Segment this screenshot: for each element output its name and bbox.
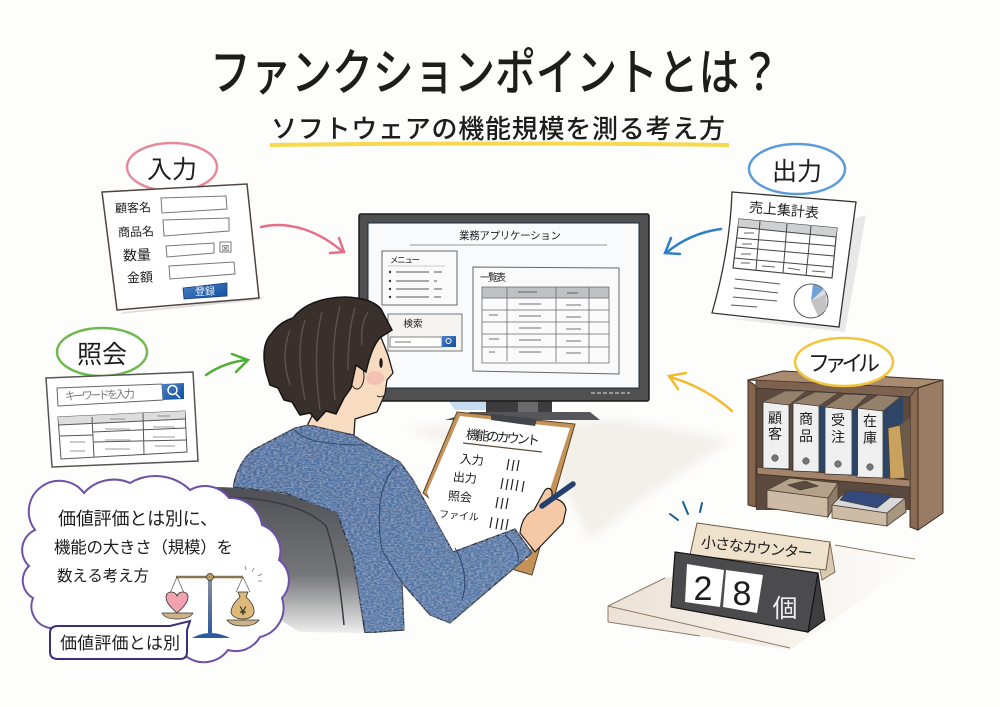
input form: 登録 <box>195 285 215 298</box>
search panel <box>388 314 462 351</box>
bookshelf: 客 <box>768 426 782 442</box>
person <box>233 297 532 633</box>
digit 2: 2 <box>694 570 712 608</box>
digit 8 <box>723 570 763 613</box>
shelf frame <box>748 371 943 388</box>
bookshelf <box>748 371 943 530</box>
inquiry bubble <box>57 328 147 376</box>
bookshelf: 注 <box>831 429 845 445</box>
subtitle with yellow underline: ソフトウェアの機能規模を測る考え方 <box>271 114 725 144</box>
input form: 顧客名 <box>115 199 151 216</box>
value label: 価値評価とは別 <box>60 634 180 653</box>
ear <box>350 363 364 389</box>
desk surface <box>405 420 730 540</box>
input form: ☒ <box>222 244 229 253</box>
bookshelf: 品 <box>799 428 813 444</box>
counter base board <box>608 545 918 650</box>
digit 2 <box>685 564 724 608</box>
tally rows: 出力 <box>452 470 477 486</box>
chair <box>215 487 366 633</box>
monitor <box>359 214 649 420</box>
search panel: 検索 <box>403 318 423 330</box>
heart <box>166 592 188 613</box>
counter side <box>808 573 825 632</box>
value label <box>50 621 190 659</box>
cloud text: 価値評価とは別に、 <box>58 509 218 529</box>
title: ファンクションポイントとは？ <box>210 45 780 101</box>
hand holding pen <box>520 484 573 552</box>
tally rows <box>438 452 524 530</box>
sales report document: 売上集計表 <box>748 199 820 221</box>
monitor frame <box>359 214 649 401</box>
input form <box>102 184 264 314</box>
search panel: キーワードを入力 <box>65 388 135 403</box>
pie chart <box>794 284 828 318</box>
arrow: inquiry to app <box>206 354 248 375</box>
eye and mouth <box>377 358 385 397</box>
tan sign: 小さなカウンター <box>700 534 813 563</box>
arrow: output to app <box>665 229 721 254</box>
list table panel: 一覧表 <box>480 271 506 284</box>
monitor stand <box>445 396 600 420</box>
shirt <box>233 425 532 633</box>
money bag <box>231 592 254 619</box>
list table panel <box>473 267 619 374</box>
screen <box>368 223 639 388</box>
binders <box>763 402 883 478</box>
input bubble <box>127 143 217 191</box>
output bubble <box>749 144 845 194</box>
file bubble <box>795 338 893 386</box>
clipboard <box>423 412 575 575</box>
neck and face <box>306 335 393 435</box>
cloud text: 数える考え方 <box>57 567 149 585</box>
input bubble: 入力 <box>147 156 197 184</box>
search panel <box>46 372 198 467</box>
cloud text <box>54 509 233 585</box>
bookshelf: 顧 <box>768 410 782 426</box>
arrow: file to app <box>669 373 732 411</box>
bookshelf: 在 <box>863 413 877 429</box>
sales report document <box>712 192 866 332</box>
storage boxes <box>767 478 906 526</box>
balance scale <box>162 566 262 638</box>
output bubble: 出力 <box>772 158 822 186</box>
hair <box>264 297 392 421</box>
counter face <box>671 552 818 632</box>
input form: 数量 <box>123 247 151 263</box>
tally rows: 入力 <box>459 452 484 468</box>
cheek <box>366 371 384 385</box>
balance scale: ¥ <box>239 604 247 618</box>
tally rows: ファイル <box>438 509 479 524</box>
menu panel: メニュー <box>390 255 420 265</box>
monitor brand mark <box>591 392 630 394</box>
tally rows: 照会 <box>447 489 472 505</box>
input form: 金額 <box>127 270 153 285</box>
tan sign <box>690 523 835 580</box>
menu panel <box>382 251 457 305</box>
bookshelf: 受 <box>831 412 845 428</box>
file bubble: ファイル <box>808 351 880 376</box>
clipboard heading: 機能のカウント <box>465 427 540 448</box>
arrow: input to app <box>261 225 344 253</box>
app title: 業務アプリケーション <box>459 229 561 242</box>
sparkle marks <box>670 502 702 520</box>
bookshelf: 商 <box>799 411 813 427</box>
digit 8: 8 <box>733 575 751 613</box>
input form: 商品名 <box>118 223 154 240</box>
cloud text: 機能の大きさ（規模）を <box>54 538 233 557</box>
unit: 個 <box>772 595 798 623</box>
inquiry bubble: 照会 <box>77 341 127 369</box>
bookshelf: 庫 <box>863 430 877 446</box>
counter <box>671 523 835 632</box>
thought cloud <box>22 476 289 662</box>
